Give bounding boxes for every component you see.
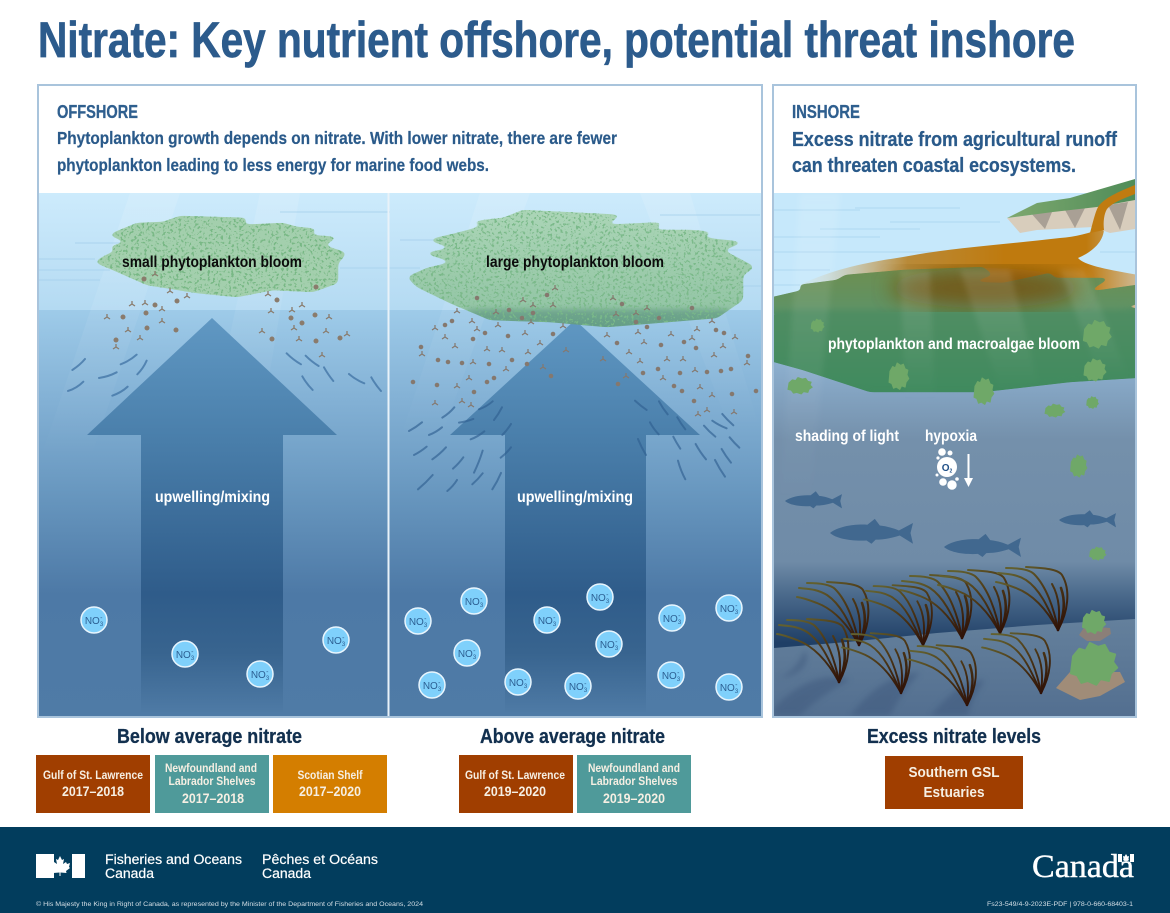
box: Gulf of St. Lawrence 2017-2018: 2017–2018 bbox=[62, 783, 124, 799]
nitrate molecules: above average: 3 bbox=[438, 687, 442, 693]
box: Newfoundland and Labrador Shelves 2017-2018 bbox=[155, 755, 269, 813]
panel: offshore bbox=[38, 85, 762, 717]
nitrate molecules: below average: - bbox=[191, 649, 194, 656]
nitrate molecules: below average: - bbox=[342, 635, 345, 642]
nitrate molecules: above average: - bbox=[615, 639, 618, 646]
nitrate molecules: above average: - bbox=[584, 681, 587, 688]
nitrate molecules: below average: - bbox=[266, 669, 269, 676]
heading: excess nitrate levels: Excess nitrate levels bbox=[867, 726, 1041, 748]
box: Scotian Shelf 2017-2020 bbox=[273, 755, 387, 813]
river plume bbox=[800, 230, 1135, 308]
nitrate molecules: below average: - bbox=[100, 615, 103, 622]
department name English: Fisheries and Oceans bbox=[105, 852, 242, 867]
nitrate molecules: below average: NO bbox=[176, 650, 191, 661]
nitrate molecules: above average: 3 bbox=[480, 603, 484, 609]
department name French: Canada bbox=[262, 866, 312, 881]
label: upwelling/mixing above average: upwelling/mixing bbox=[517, 489, 633, 506]
inshore heading: INSHORE bbox=[792, 102, 860, 122]
nitrate molecules: above average: 3 bbox=[735, 689, 739, 695]
nitrate molecules: above average: NO bbox=[720, 683, 735, 694]
sea floor bbox=[774, 619, 1135, 716]
nitrate molecules: above average: - bbox=[480, 596, 483, 603]
department name English bbox=[105, 852, 242, 881]
box: Newfoundland and Labrador Shelves 2019-2020: Newfoundland and bbox=[588, 761, 680, 775]
nitrate molecules: above average: 3 bbox=[584, 688, 588, 694]
heading: above average nitrate: Above average nitrate bbox=[480, 726, 665, 748]
nitrate molecules: above average: - bbox=[735, 682, 738, 689]
offshore water scene bbox=[39, 193, 761, 716]
label: upwelling/mixing below average: upwelling/mixing bbox=[155, 489, 270, 506]
green bloom bbox=[760, 267, 1150, 392]
icon: oxygen bubbles with down arrow: O bbox=[942, 463, 950, 474]
nitrate molecules: above average: NO bbox=[458, 649, 473, 660]
nitrate molecules: above average: NO bbox=[663, 614, 678, 625]
nitrate molecules: above average: - bbox=[524, 677, 527, 684]
nitrate molecules: above average: - bbox=[473, 648, 476, 655]
department name French: Pêches et Océans bbox=[262, 852, 378, 867]
inshore water scene bbox=[760, 193, 1150, 716]
nitrate molecules: above average: - bbox=[424, 616, 427, 623]
nitrate molecules: below average: 3 bbox=[100, 622, 104, 628]
nitrate molecules: above average: NO bbox=[509, 678, 524, 689]
inshore description: Excess nitrate from agricultural runoff bbox=[792, 129, 1117, 151]
box: Scotian Shelf 2017-2020: Scotian Shelf bbox=[298, 768, 363, 782]
nitrate molecules: above average: - bbox=[678, 613, 681, 620]
nitrate molecules: below average: NO bbox=[327, 636, 342, 647]
eelgrass bbox=[777, 567, 1067, 705]
icon: oxygen bubbles with down arrow bbox=[936, 448, 973, 490]
icon: Canadian flag signature bbox=[36, 854, 85, 878]
nitrate molecules: above average: 3 bbox=[424, 623, 428, 629]
nitrate molecules: above average: 3 bbox=[524, 684, 528, 690]
label: shading of light: shading of light bbox=[795, 428, 900, 445]
heading: below average nitrate: Below average nitrate bbox=[117, 726, 302, 748]
nitrate molecules: above average: 3 bbox=[677, 677, 681, 683]
nitrate molecules: below average: 3 bbox=[342, 642, 346, 648]
nitrate molecules: above average: - bbox=[553, 615, 556, 622]
nitrate molecules: above average: NO bbox=[720, 604, 735, 615]
nitrate molecules: above average: 3 bbox=[553, 622, 557, 628]
offshore heading: OFFSHORE bbox=[57, 102, 138, 122]
small fish: above average bbox=[409, 401, 739, 491]
offshore description: phytoplankton leading to less energy for marine food webs. bbox=[57, 155, 489, 175]
box: Gulf of St. Lawrence 2019-2020: Gulf of St. Lawrence bbox=[465, 768, 565, 782]
phytoplankton particles: below average bbox=[104, 271, 350, 357]
phytoplankton particles: above average bbox=[413, 285, 756, 416]
nitrate molecules: below average: 3 bbox=[266, 676, 270, 682]
nitrate molecules: above average: NO bbox=[409, 617, 424, 628]
nitrate molecules: above average: - bbox=[735, 603, 738, 610]
label: large phytoplankton bloom: large phytoplankton bloom bbox=[486, 254, 664, 271]
box: Gulf of St. Lawrence 2019-2020 bbox=[459, 755, 573, 813]
box: Southern GSL Estuaries: Southern GSL bbox=[908, 764, 1000, 781]
box: Scotian Shelf 2017-2020: 2017–2020 bbox=[299, 783, 361, 799]
nitrate molecules: above average: 3 bbox=[678, 620, 682, 626]
inshore description: can threaten coastal ecosystems. bbox=[792, 155, 1076, 177]
copyright: © His Majesty the King in Right of Canada, as represented by the Minister of the Department of Fisheries and Oceans, 2024 bbox=[36, 900, 423, 908]
offshore description: Phytoplankton growth depends on nitrate. With lower nitrate, there are fewer bbox=[57, 128, 617, 148]
footer bbox=[0, 827, 1170, 913]
nitrate molecules: below average: NO bbox=[85, 616, 100, 627]
department name English: Canada bbox=[105, 866, 155, 881]
box: Newfoundland and Labrador Shelves 2019-2020: 2019–2020 bbox=[603, 790, 665, 806]
nitrate molecules: above average: 3 bbox=[473, 655, 477, 661]
box: Southern GSL Estuaries: Estuaries bbox=[924, 784, 984, 801]
fish silhouettes bbox=[785, 491, 1116, 557]
box: Newfoundland and Labrador Shelves 2019-2020: Labrador Shelves bbox=[590, 774, 678, 788]
nitrate molecules: above average: - bbox=[606, 592, 609, 599]
small phytoplankton bloom bbox=[94, 216, 347, 297]
nitrate molecules: above average: NO bbox=[465, 597, 480, 608]
label: phytoplankton and macroalgae bloom: phytoplankton and macroalgae bloom bbox=[828, 336, 1080, 353]
box: Southern GSL Estuaries bbox=[885, 756, 1023, 809]
nitrate molecules: above average: NO bbox=[423, 681, 438, 692]
box: Newfoundland and Labrador Shelves 2017-2018: 2017–2018 bbox=[182, 790, 244, 806]
nitrate molecules: above average: - bbox=[438, 680, 441, 687]
land and cliff bbox=[1007, 179, 1135, 233]
nitrate molecules: above average: 3 bbox=[615, 646, 619, 652]
nitrate molecules: above average: NO bbox=[600, 640, 615, 651]
nitrate molecules: above average bbox=[405, 584, 742, 700]
nitrate molecules: above average: - bbox=[677, 670, 680, 677]
department name French bbox=[262, 852, 378, 881]
large phytoplankton bloom bbox=[407, 210, 755, 327]
nitrate molecules: above average: 3 bbox=[606, 599, 610, 605]
nitrate molecules: below average: 3 bbox=[191, 656, 195, 662]
box: Gulf of St. Lawrence 2017-2018: Gulf of St. Lawrence bbox=[43, 768, 143, 782]
label: hypoxia: hypoxia bbox=[925, 428, 977, 445]
icon: oxygen bubbles with down arrow: 2 bbox=[950, 468, 952, 474]
publication number: Fs23-549/4-9-2023E-PDF | 978-0-660-68403-1 bbox=[987, 901, 1133, 908]
nitrate molecules: above average: NO bbox=[662, 671, 677, 682]
nitrate molecules: above average: 3 bbox=[735, 610, 739, 616]
rocks with macroalgae bbox=[1056, 610, 1125, 700]
box: Newfoundland and Labrador Shelves 2019-2020 bbox=[577, 755, 691, 813]
small fish: below average bbox=[68, 353, 381, 396]
nitrate molecules: above average: NO bbox=[538, 616, 553, 627]
arrow: upwelling below average bbox=[87, 318, 337, 712]
box: Gulf of St. Lawrence 2019-2020: 2019–2020 bbox=[484, 783, 546, 799]
box: Newfoundland and Labrador Shelves 2017-2018: Labrador Shelves bbox=[168, 774, 256, 788]
nitrate molecules: below average: NO bbox=[251, 670, 266, 681]
nitrate molecules: above average: NO bbox=[591, 593, 606, 604]
offshore description bbox=[57, 128, 617, 175]
panel: inshore bbox=[760, 85, 1150, 717]
arrow: upwelling above average bbox=[450, 320, 700, 712]
nitrate molecules: above average: NO bbox=[569, 682, 584, 693]
box: Newfoundland and Labrador Shelves 2017-2018: Newfoundland and bbox=[165, 761, 257, 775]
nitrate molecules: below average bbox=[81, 607, 349, 687]
label: small phytoplankton bloom: small phytoplankton bloom bbox=[122, 254, 302, 271]
macroalgae clumps bbox=[788, 319, 1111, 560]
inshore description bbox=[792, 129, 1117, 177]
Canada wordmark: Canada bbox=[1032, 849, 1134, 885]
box: Gulf of St. Lawrence 2017-2018 bbox=[36, 755, 150, 813]
